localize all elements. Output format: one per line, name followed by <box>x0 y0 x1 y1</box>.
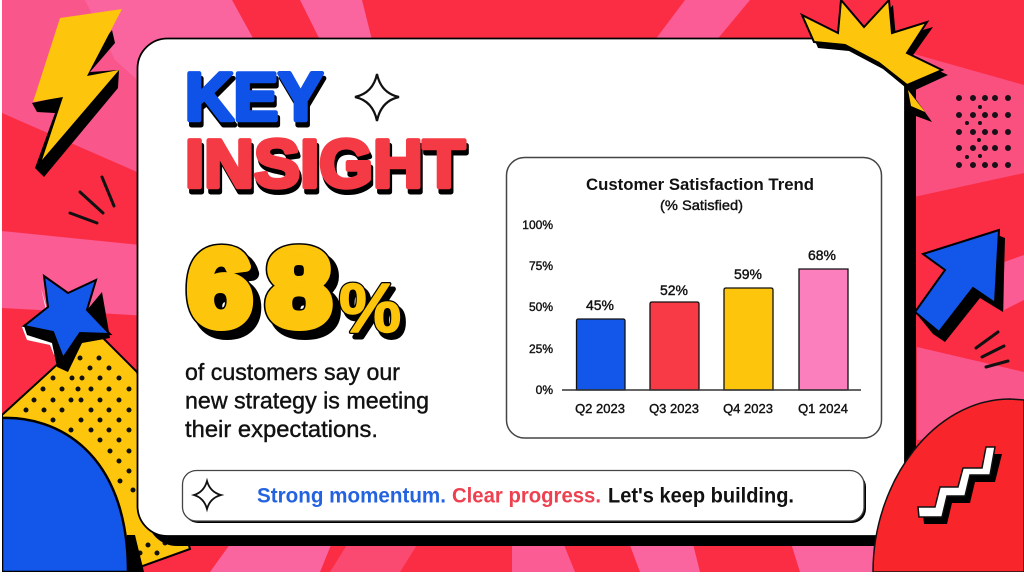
data labels: 59% <box>734 266 762 282</box>
text: stat description <box>185 359 429 442</box>
heading: KEY INSIGHT <box>185 59 467 207</box>
stat: 68 percent: 6 <box>188 227 252 348</box>
decor: red circle <box>873 399 1024 572</box>
bars <box>576 269 848 390</box>
text: stat description: their expectations. <box>185 416 378 442</box>
icon: blue star <box>22 276 110 372</box>
heading: KEY INSIGHT: KEY <box>185 59 323 135</box>
heading: KEY INSIGHT: INSIGHT <box>187 131 467 207</box>
y axis labels: 75% <box>529 259 553 273</box>
stat: 68 percent: 6 <box>194 234 258 355</box>
panel: main card <box>138 38 916 546</box>
quarter labels: Q1 2024 <box>798 401 848 416</box>
banner text: Let's keep building. <box>608 484 794 508</box>
stat: 68 percent: 8 <box>267 227 331 348</box>
data labels <box>586 247 836 313</box>
icon: lightning bolt <box>32 9 122 177</box>
y axis labels: 0% <box>536 383 553 397</box>
stat: 68 percent: 6 <box>188 227 252 348</box>
icon: right burst marks <box>976 332 1008 367</box>
stat: 68 percent: 8 <box>273 234 337 355</box>
icon: blue up arrow <box>915 230 1005 342</box>
y axis labels: 25% <box>529 342 553 356</box>
banner text <box>257 484 794 508</box>
heading: KEY INSIGHT: INSIGHT <box>185 126 465 202</box>
quarter labels: Q4 2023 <box>723 401 773 416</box>
panel: takeaway banner <box>182 470 866 523</box>
stat: 68 percent: % <box>339 269 401 347</box>
y axis labels: 100% <box>522 218 553 232</box>
icon: sparkle <box>355 74 399 121</box>
decor: blue circle <box>2 418 144 572</box>
chart title: Customer Satisfaction Trend <box>586 175 814 194</box>
stat: 68 percent: % <box>339 269 401 347</box>
quarter labels: Q3 2023 <box>649 401 699 416</box>
icon: dot grid <box>959 98 1008 165</box>
banner text: Clear progress. <box>452 484 601 508</box>
chart subtitle: (% Satisfied) <box>660 197 743 213</box>
stat: 68 percent: 8 <box>267 227 331 348</box>
icon: white zigzag stairs <box>918 447 1002 524</box>
data labels: 45% <box>586 297 614 313</box>
panel: bar chart <box>506 158 882 438</box>
quarter labels <box>575 401 848 416</box>
heading: KEY INSIGHT: KEY <box>187 64 325 140</box>
stat: 68 percent <box>188 227 405 355</box>
icon: banner sparkle <box>194 481 221 509</box>
banner text: Strong momentum. <box>257 484 446 508</box>
quarter labels: Q2 2023 <box>575 401 625 416</box>
data labels: 52% <box>660 282 688 298</box>
data labels: 68% <box>808 247 836 263</box>
icon: left burst marks <box>70 177 114 223</box>
text: stat description: of customers say our <box>185 359 400 385</box>
text: stat description: new strategy is meeting <box>185 388 429 414</box>
icon: yellow spiky burst <box>802 0 948 122</box>
x axis <box>562 389 861 391</box>
y axis labels: 50% <box>529 300 553 314</box>
decor: yellow halftone triangle <box>2 330 190 567</box>
y axis labels <box>522 218 553 397</box>
stat: 68 percent: % <box>343 274 405 352</box>
